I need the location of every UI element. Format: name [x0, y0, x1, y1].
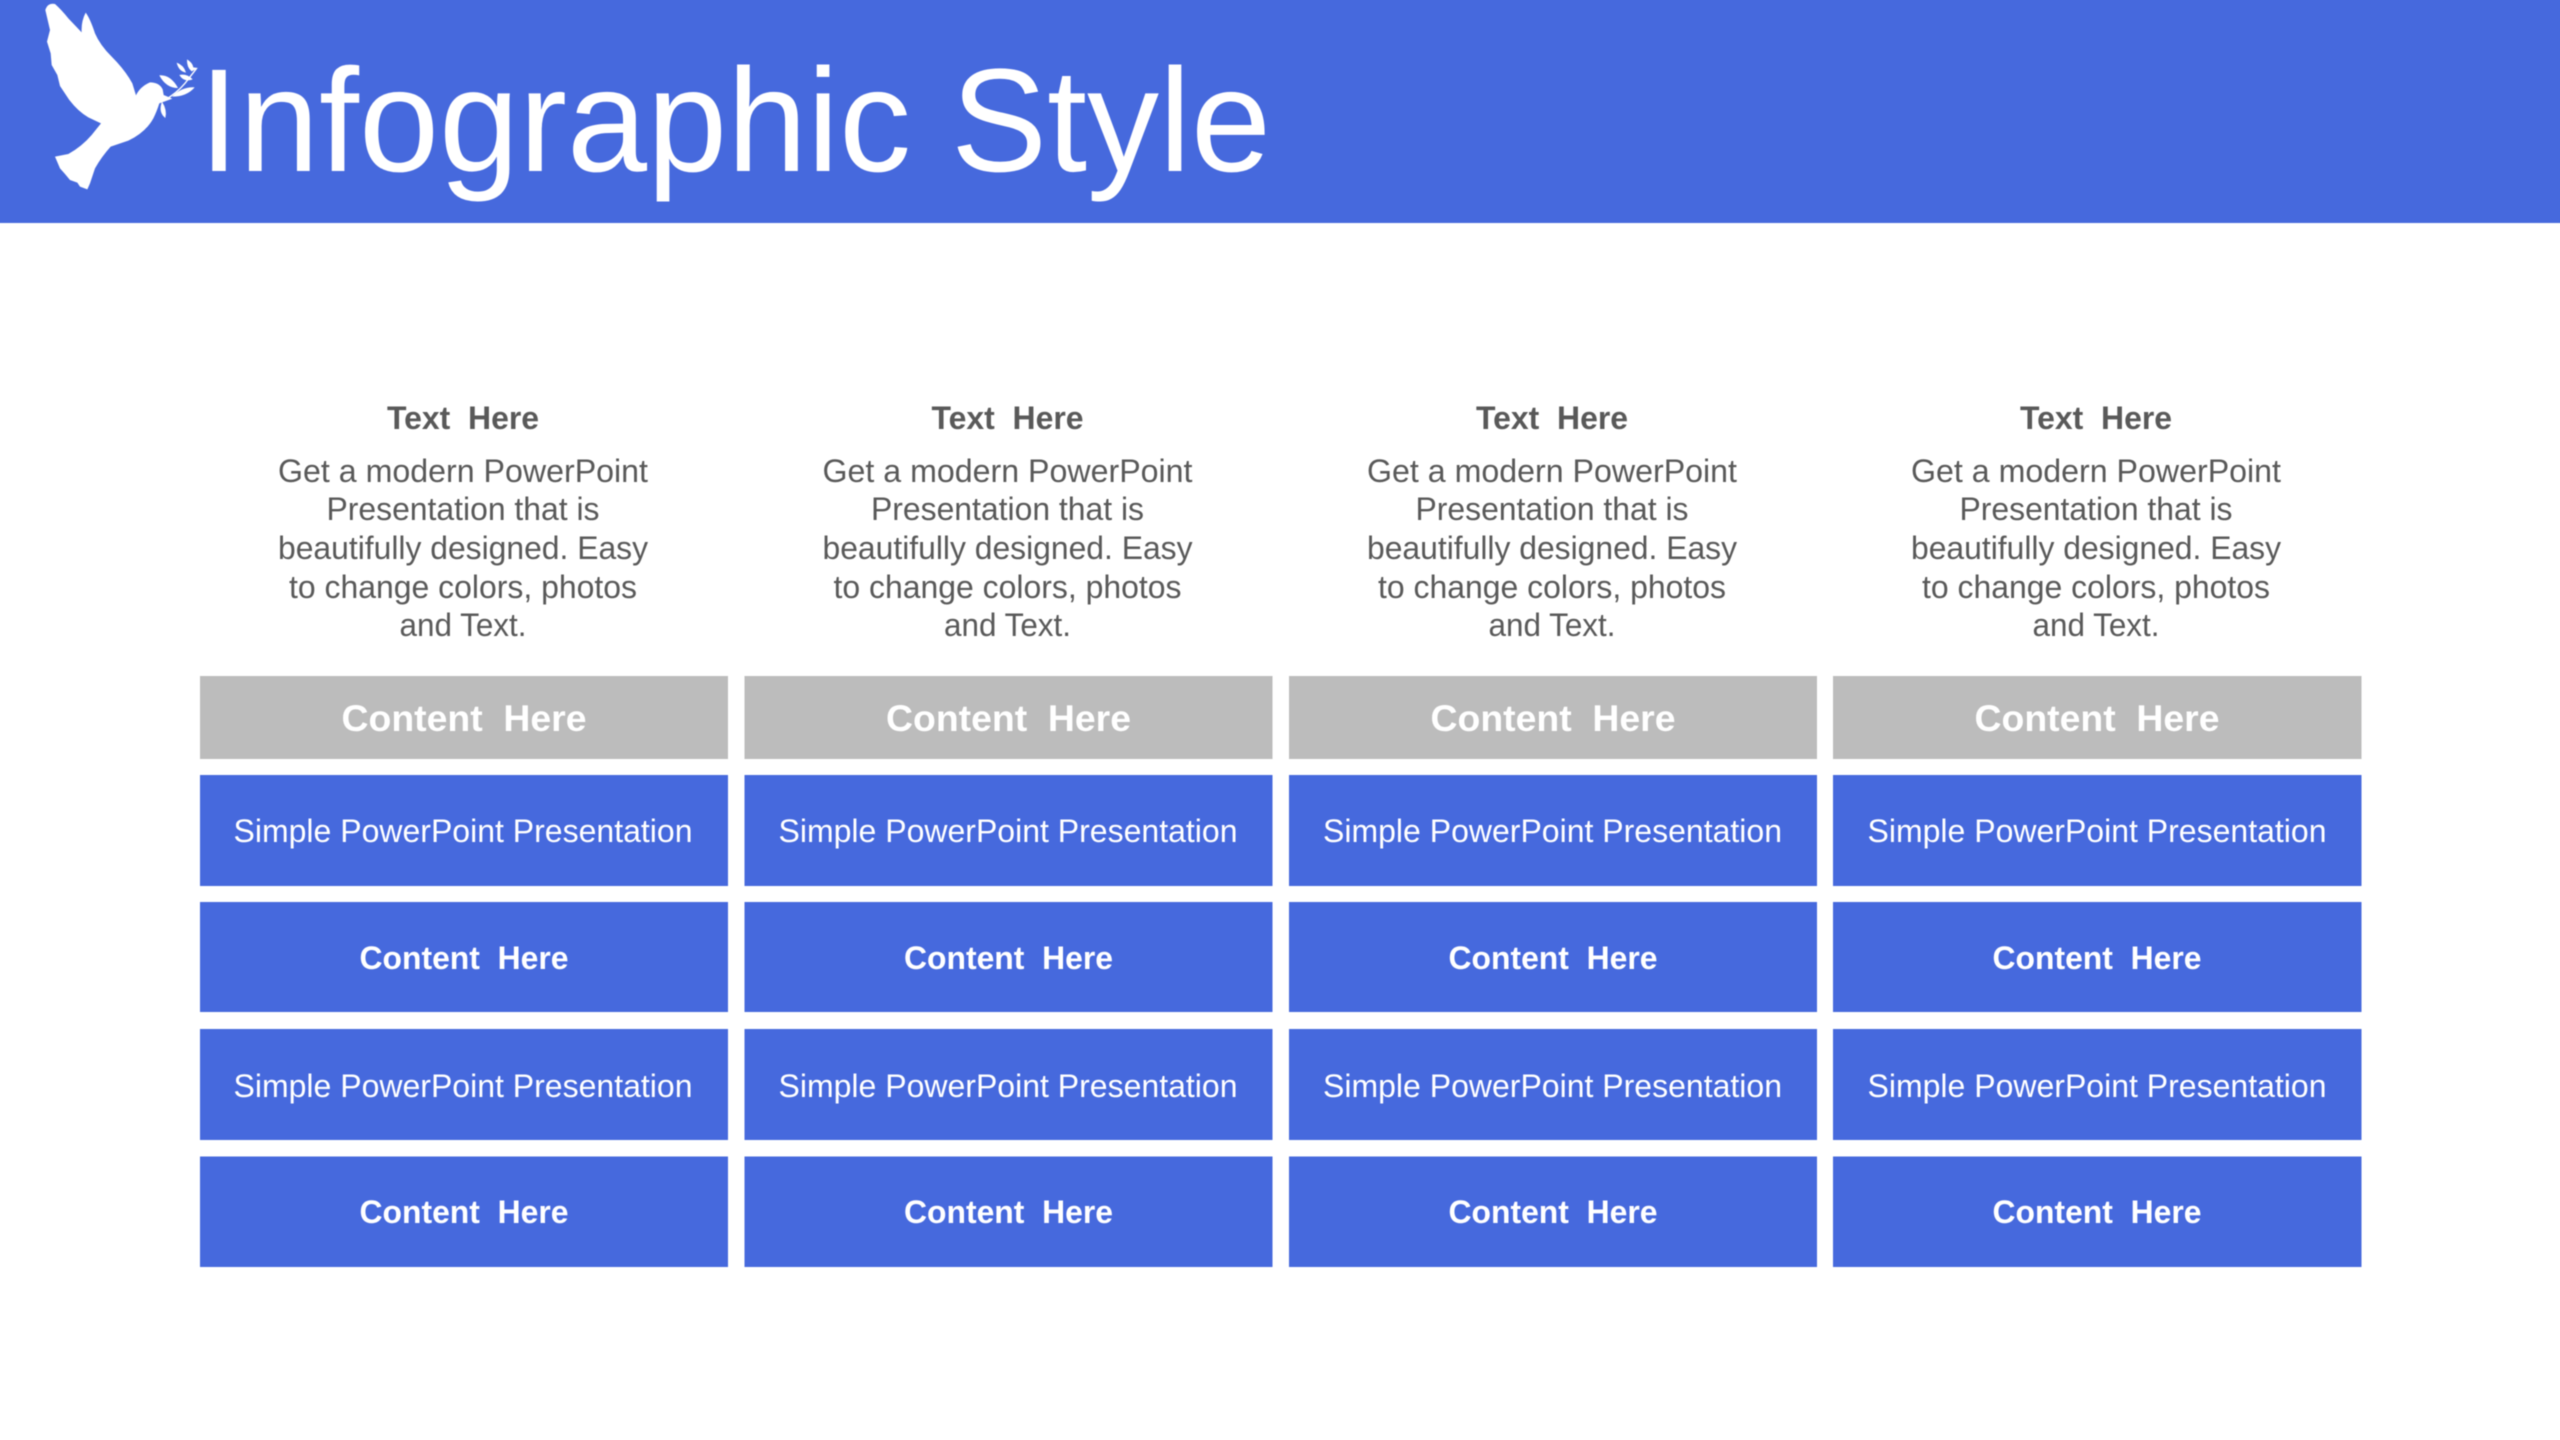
column 4 description: beautifully designed. Easy — [1911, 530, 2282, 566]
icon: dove with olive branch — [45, 4, 198, 189]
column 1 description: to change colors, photos — [289, 569, 637, 605]
column 2 description: and Text. — [944, 607, 1071, 643]
column 2 description: beautifully designed. Easy — [822, 530, 1193, 566]
column 1 row 1: Simple PowerPoint Presentation — [234, 813, 692, 849]
column 4 grey header box: Content Here — [1974, 698, 2220, 739]
column 4 description: to change colors, photos — [1922, 569, 2270, 605]
column 2 grey header box: Content Here — [886, 698, 1131, 739]
column 3 row 2 — [1289, 902, 1817, 1012]
column 2 row 3: Simple PowerPoint Presentation — [778, 1068, 1238, 1104]
column 2 description — [822, 453, 1193, 643]
column 4 row 1 — [1833, 775, 2362, 886]
column 2 description: to change colors, photos — [834, 569, 1182, 605]
column 1 description: Presentation that is — [326, 491, 600, 527]
column 4 heading: Text Here — [2020, 400, 2172, 436]
column 3 row 1 — [1289, 775, 1817, 886]
column 3 description — [1367, 453, 1738, 643]
column 3 row 3: Simple PowerPoint Presentation — [1323, 1068, 1782, 1104]
column 1 row 1 — [200, 775, 728, 886]
column 3 row 3 — [1289, 1029, 1817, 1140]
column 2 row 3 — [744, 1029, 1272, 1140]
column 2 grey header box — [744, 676, 1272, 759]
column 3 — [1289, 400, 1817, 1267]
title: Infographic Style — [199, 39, 1271, 203]
column 3 row 4 — [1289, 1156, 1817, 1267]
column 4 — [1833, 400, 2362, 1267]
column 3 description: to change colors, photos — [1378, 569, 1726, 605]
column 4 row 3: Simple PowerPoint Presentation — [1868, 1068, 2326, 1104]
column 2 row 2 — [744, 902, 1272, 1012]
column 3 description: and Text. — [1488, 607, 1616, 643]
column 1 heading: Text Here — [387, 400, 539, 436]
column 4 grey header box — [1833, 676, 2362, 759]
column 3 row 1: Simple PowerPoint Presentation — [1323, 813, 1782, 849]
column 3 row 4: Content Here — [1448, 1194, 1658, 1230]
column 2 row 4: Content Here — [904, 1194, 1113, 1230]
column 4 row 1: Simple PowerPoint Presentation — [1868, 813, 2326, 849]
column 3 description: beautifully designed. Easy — [1367, 530, 1738, 566]
column 3 row 2: Content Here — [1448, 940, 1658, 976]
column 4 row 3 — [1833, 1029, 2362, 1140]
column 1 description: and Text. — [400, 607, 526, 643]
column 4 description: Presentation that is — [1960, 491, 2232, 527]
column 4 row 4: Content Here — [1992, 1194, 2202, 1230]
column 2 description: Get a modern PowerPoint — [822, 453, 1192, 489]
column 3 grey header box: Content Here — [1430, 698, 1676, 739]
column 2 heading: Text Here — [932, 400, 1084, 436]
header band — [0, 0, 2560, 223]
column 1 grey header box — [200, 676, 728, 759]
column 2 — [744, 400, 1272, 1267]
column 1 grey header box: Content Here — [342, 698, 586, 739]
column 1 — [200, 400, 728, 1267]
column 4 description: Get a modern PowerPoint — [1911, 453, 2281, 489]
column 2 row 1: Simple PowerPoint Presentation — [778, 813, 1238, 849]
column 1 row 4: Content Here — [360, 1194, 568, 1230]
column 4 description — [1911, 453, 2282, 643]
column 1 row 3: Simple PowerPoint Presentation — [234, 1068, 692, 1104]
column 4 row 4 — [1833, 1156, 2362, 1267]
column 4 row 2 — [1833, 902, 2362, 1012]
column 1 row 2 — [200, 902, 728, 1012]
column 1 description: Get a modern PowerPoint — [278, 453, 648, 489]
column 1 row 4 — [200, 1156, 728, 1267]
column 2 row 2: Content Here — [904, 940, 1113, 976]
column 1 row 2: Content Here — [360, 940, 568, 976]
column 4 description: and Text. — [2032, 607, 2160, 643]
column 1 description: beautifully designed. Easy — [278, 530, 649, 566]
column 2 description: Presentation that is — [871, 491, 1144, 527]
column 1 description — [278, 453, 649, 643]
column 3 heading: Text Here — [1476, 400, 1628, 436]
column 3 description: Get a modern PowerPoint — [1367, 453, 1737, 489]
column 3 grey header box — [1289, 676, 1817, 759]
column 2 row 1 — [744, 775, 1272, 886]
column 4 row 2: Content Here — [1992, 940, 2202, 976]
column 3 description: Presentation that is — [1416, 491, 1688, 527]
column 2 row 4 — [744, 1156, 1272, 1267]
column 1 row 3 — [200, 1029, 728, 1140]
